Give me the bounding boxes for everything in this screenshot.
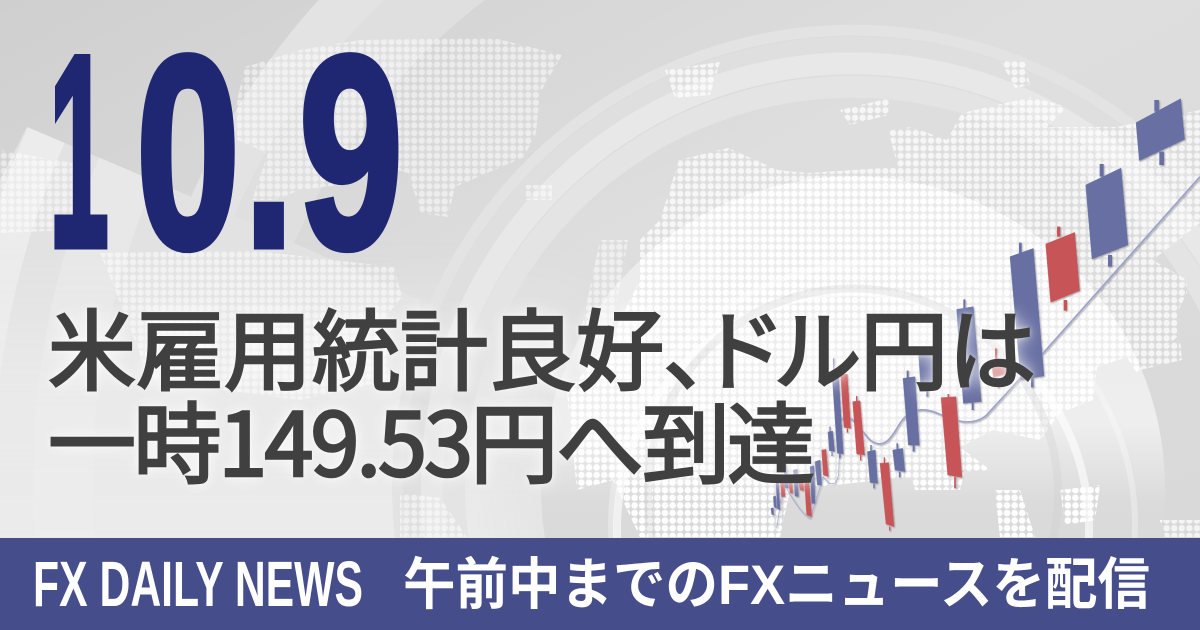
date heading: 0 [136,0,240,306]
inner bright rings [611,263,1135,630]
large top-left rings [0,0,484,364]
dotted map: right continents [640,62,1200,537]
banner title: FX DAILY NEWS [33,548,363,620]
date heading: . [244,0,294,305]
concentric globe rings [397,30,1200,630]
dotted map: bright part inside the globe [574,462,1162,537]
banner description: 午前中までのFXニュースを配信 [403,553,1150,616]
headline line 1: 米雇用統計良好、ドル円は [48,282,1036,409]
date heading: 9 [299,0,403,306]
date heading: 1 [49,0,109,305]
blue candles [771,99,1185,515]
dotted map: left continents [0,38,628,537]
moving average line [777,177,1200,528]
headline line 2: 一時149.53円へ到達 [48,375,812,502]
red candles [780,227,1080,531]
globe disc [541,176,1165,630]
